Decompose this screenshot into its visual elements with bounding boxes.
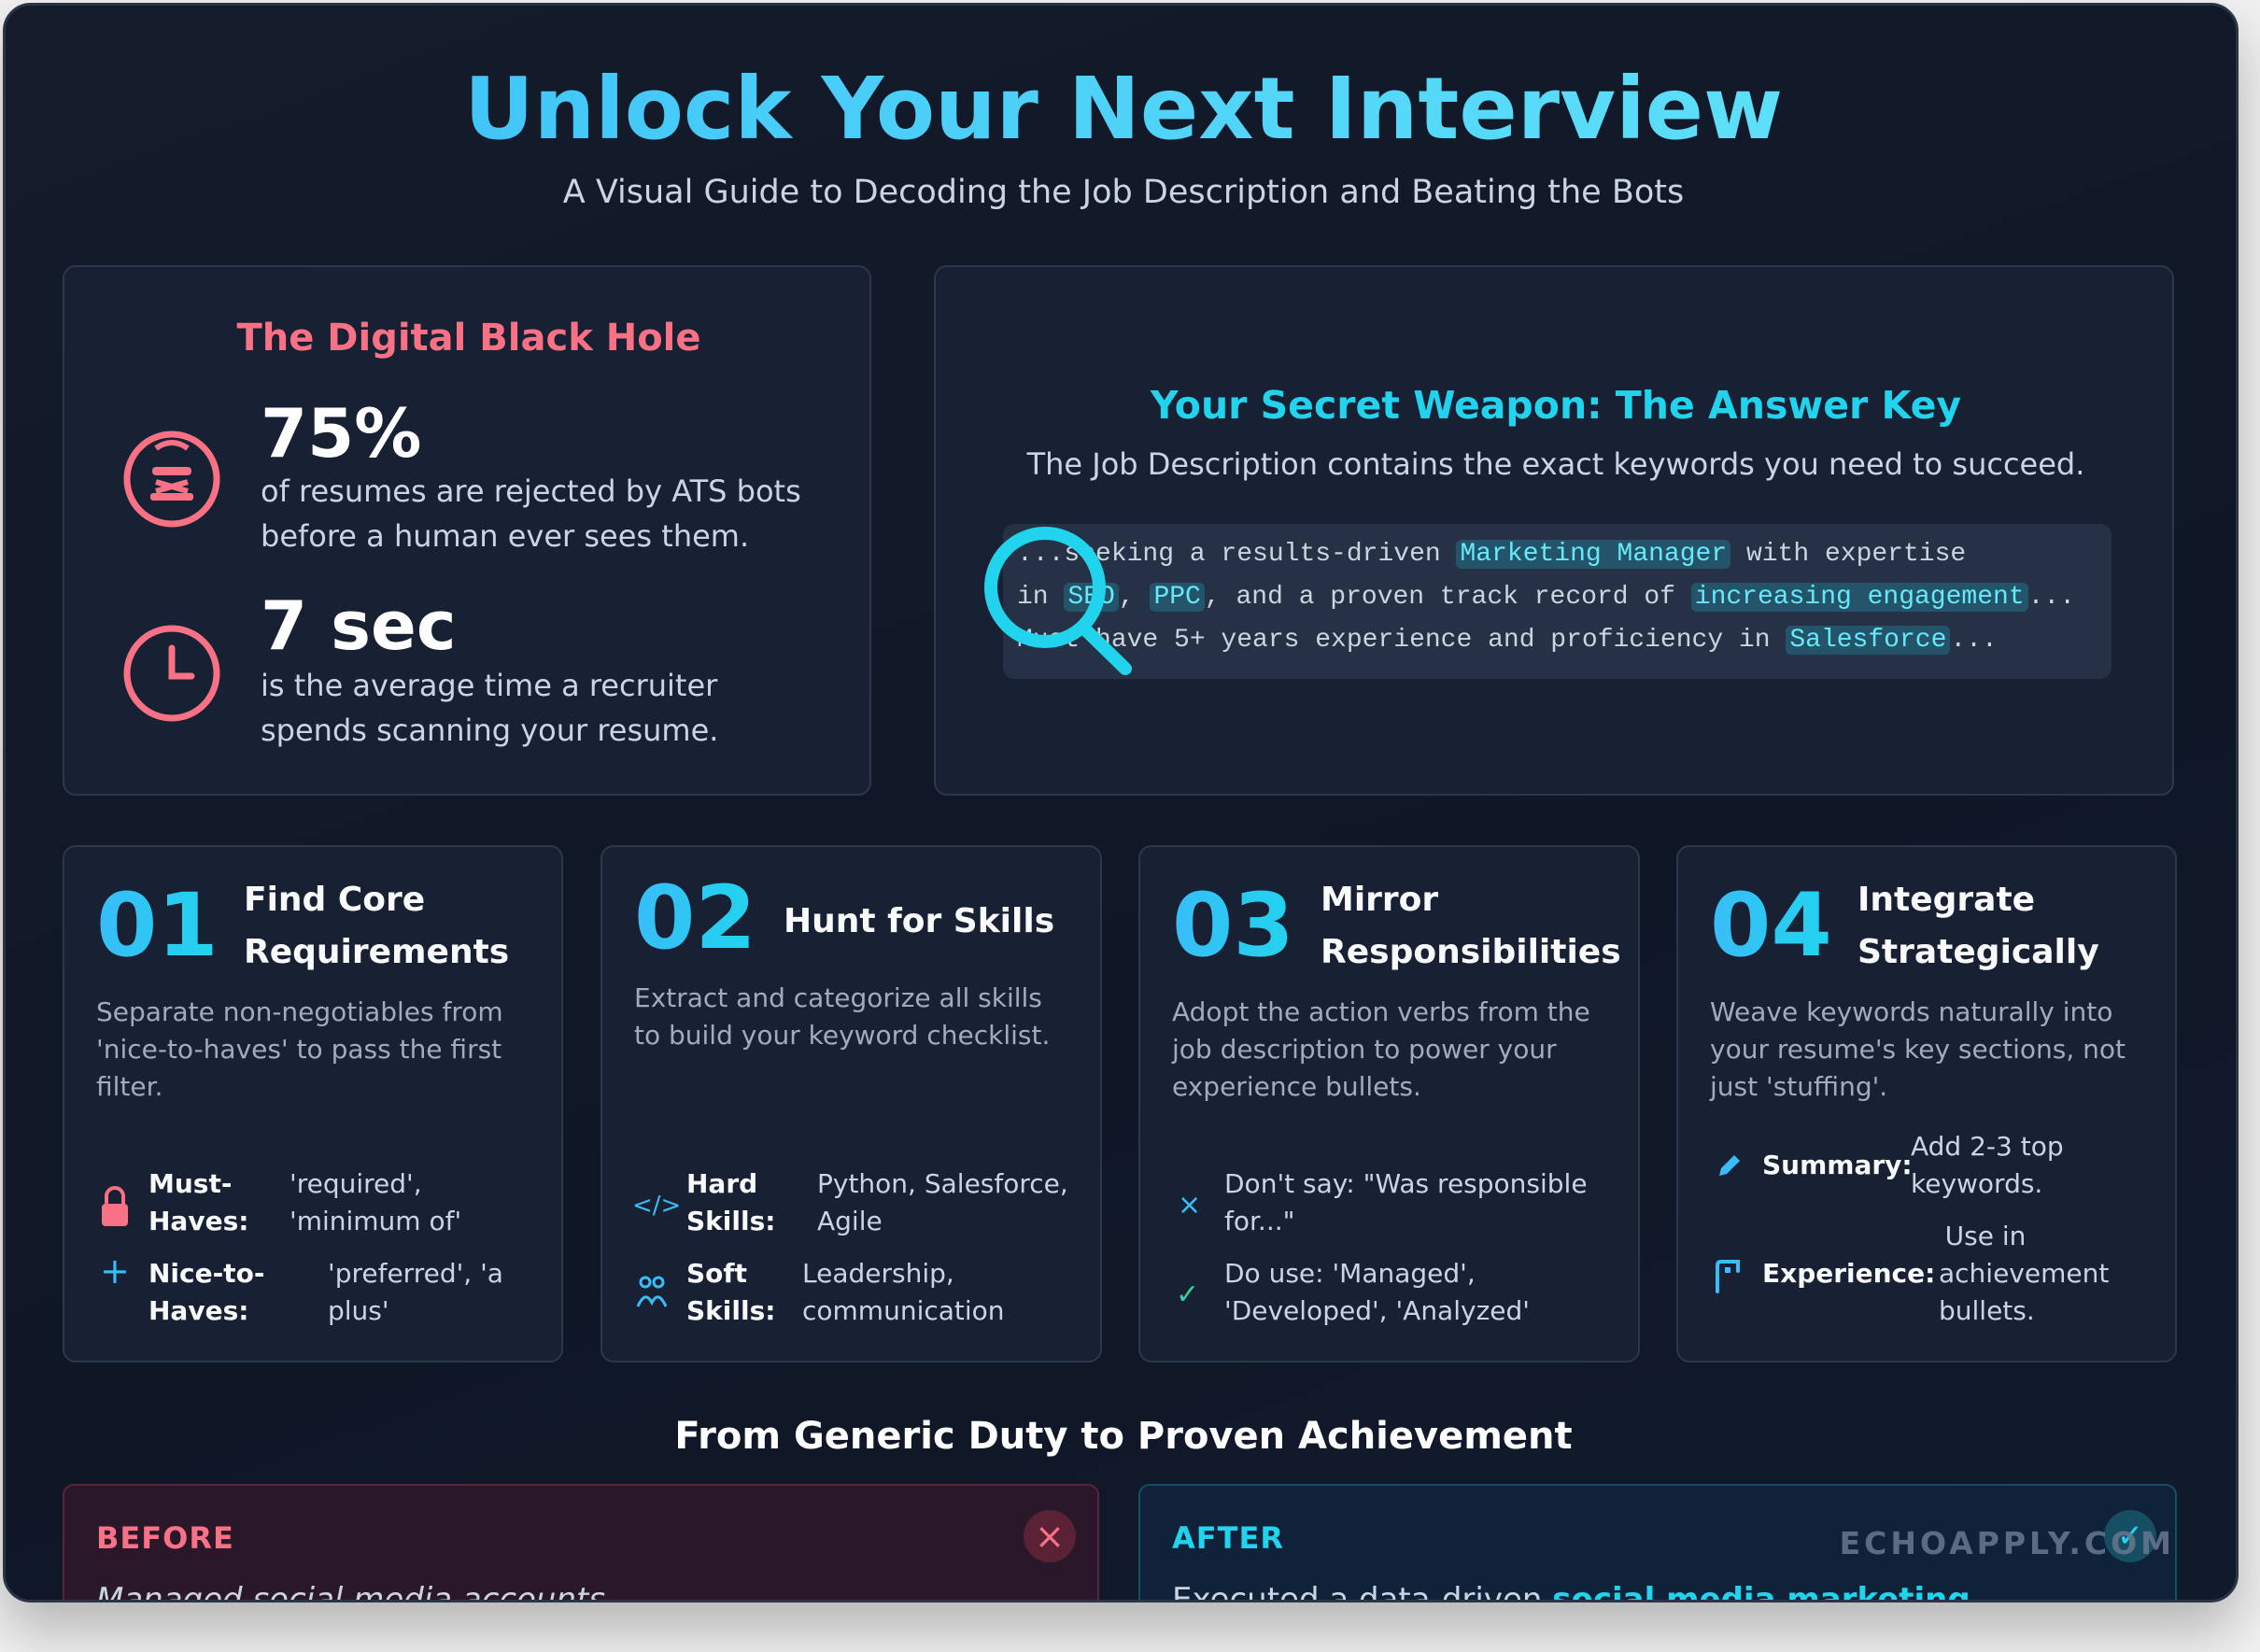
icon: clock xyxy=(123,626,220,721)
step 04: Experience: xyxy=(1762,1258,1935,1289)
step 01: 'minimum of' xyxy=(290,1206,461,1236)
step 01: plus' xyxy=(328,1295,389,1326)
step 02: Extract and categorize all skills xyxy=(634,982,1042,1013)
step 04 xyxy=(1676,845,2177,1363)
icon: x circle: × xyxy=(1035,1516,1065,1557)
stat text xyxy=(261,473,801,554)
icon: plus: + xyxy=(100,1250,130,1292)
code box: ...seeking a results-driven Marketing Manager with expertise xyxy=(1017,540,1966,569)
step 02: Hunt for Skills xyxy=(784,902,1054,940)
icon: bot xyxy=(123,431,220,527)
step 01: 01 xyxy=(96,875,219,977)
step 03: job description to power your xyxy=(1172,1034,1557,1065)
step 04: keywords. xyxy=(1911,1168,2042,1199)
step 04: Add 2-3 top xyxy=(1911,1131,2064,1162)
stat 7 sec: 7 sec xyxy=(261,586,457,665)
step 04: just 'stuffing'. xyxy=(1710,1071,1887,1102)
step 01: Haves: xyxy=(148,1295,248,1326)
panel: after xyxy=(1138,1484,2177,1652)
step 03 xyxy=(1138,845,1640,1363)
step 01: Separate non-negotiables from xyxy=(96,996,503,1027)
step 03: for..." xyxy=(1224,1206,1295,1236)
step 02: Skills: xyxy=(686,1206,775,1236)
step 04: bullets. xyxy=(1939,1295,2035,1326)
panel: before xyxy=(63,1484,1099,1652)
stat text: spends scanning your resume. xyxy=(261,713,718,748)
heading: Your Secret Weapon: The Answer Key xyxy=(1151,383,1961,428)
panel: before: BEFORE xyxy=(96,1520,234,1556)
icon: doc xyxy=(1716,1260,1740,1293)
step 02: Hard xyxy=(686,1168,757,1199)
icon: lock xyxy=(102,1186,128,1226)
subtitle: A Visual Guide to Decoding the Job Description and Beating the Bots xyxy=(563,174,1684,211)
step 04: Integrate xyxy=(1857,881,2035,919)
title: Unlock Your Next Interview xyxy=(464,59,1783,159)
icon: people xyxy=(637,1276,667,1307)
step 04: 04 xyxy=(1710,875,1832,977)
step 04: Weave keywords naturally into xyxy=(1710,996,2112,1027)
step 01: 'preferred', 'a xyxy=(328,1258,503,1289)
icon: cross: × xyxy=(1178,1189,1201,1221)
subheading: The Job Description contains the exact keywords you need to succeed. xyxy=(1027,446,2084,482)
icon: x circle xyxy=(1024,1510,1076,1562)
step 02: Skills: xyxy=(686,1295,775,1326)
icon: check circle: ✓ xyxy=(2117,1518,2143,1555)
step 03: 'Developed', 'Analyzed' xyxy=(1224,1295,1530,1326)
step 02: Leadership, xyxy=(802,1258,954,1289)
stat 75%: 75% xyxy=(261,394,421,473)
step 04: your resume's key sections, not xyxy=(1710,1034,2126,1065)
step 02: Python, Salesforce, xyxy=(817,1168,1068,1199)
step 02 xyxy=(600,845,1102,1363)
section heading: From Generic Duty to Proven Achievement xyxy=(674,1415,1573,1458)
icon: pencil xyxy=(1719,1155,1740,1176)
step 03: Adopt the action verbs from the xyxy=(1172,996,1590,1027)
icon: code: </> xyxy=(632,1192,681,1220)
step 01: 'required', xyxy=(290,1168,422,1199)
step 03: 03 xyxy=(1172,875,1294,977)
step 02: 02 xyxy=(634,868,756,969)
step 01: Must- xyxy=(148,1168,232,1199)
step 04: Summary: xyxy=(1762,1150,1913,1180)
stat text: of resumes are rejected by ATS bots xyxy=(261,473,801,509)
icon: magnifier xyxy=(984,527,1132,675)
step 04: Use in xyxy=(1945,1221,2026,1251)
step 01: Find Core xyxy=(244,881,425,919)
step 01: Requirements xyxy=(244,933,509,971)
step 02: to build your keyword checklist. xyxy=(634,1020,1050,1051)
step 03: Do use: 'Managed', xyxy=(1224,1258,1476,1289)
icon: check circle xyxy=(2104,1510,2156,1562)
code box: in SEO, PPC, and a proven track record of increasing engagement... xyxy=(1017,583,2075,612)
step 01: Nice-to- xyxy=(148,1258,264,1289)
code box xyxy=(1003,524,2112,679)
step 02: Agile xyxy=(817,1206,883,1236)
stat text xyxy=(261,668,718,748)
step 01 xyxy=(63,845,563,1363)
step 03: Don't say: "Was responsible xyxy=(1224,1168,1588,1199)
step 02: communication xyxy=(802,1295,1005,1326)
step 03: Responsibilities xyxy=(1321,933,1621,971)
step 01: 'nice-to-haves' to pass the first xyxy=(96,1034,501,1065)
watermark: ECHOAPPLY.COM xyxy=(1840,1525,2175,1561)
step 04: achievement xyxy=(1939,1258,2109,1289)
step 01: Haves: xyxy=(148,1206,248,1236)
panel: after: AFTER xyxy=(1172,1520,1284,1556)
icon: check: ✓ xyxy=(1176,1278,1199,1311)
title xyxy=(1,58,2246,161)
code box: Must have 5+ years experience and proficiency in Salesforce... xyxy=(1017,626,1998,655)
panel: secret weapon xyxy=(934,265,2174,796)
step 04: Strategically xyxy=(1857,933,2099,971)
stat text: before a human ever sees them. xyxy=(261,518,749,554)
panel: digital black hole xyxy=(63,265,871,796)
step 01: filter. xyxy=(96,1071,162,1102)
stat text: is the average time a recruiter xyxy=(261,668,717,703)
step 02: Soft xyxy=(686,1258,747,1289)
heading: The Digital Black Hole xyxy=(236,317,701,360)
step 03: experience bullets. xyxy=(1172,1071,1421,1102)
step 03: Mirror xyxy=(1321,881,1438,919)
